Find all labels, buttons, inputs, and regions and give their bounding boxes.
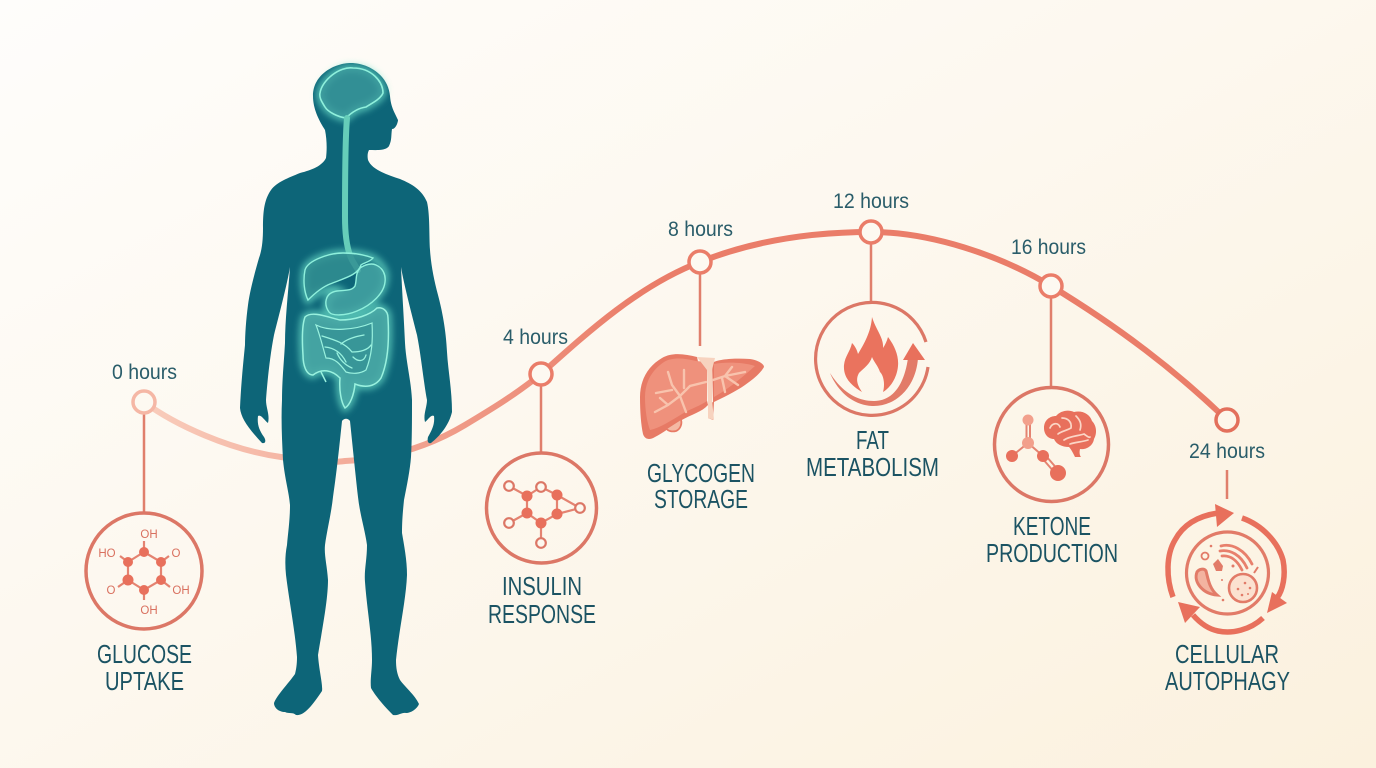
heading: FAT: [856, 425, 889, 455]
icon: glucose molecule: O: [107, 585, 116, 597]
heading line 2: METABOLISM: [806, 452, 939, 482]
time label: 24 hours: [1189, 440, 1265, 463]
intestines: [302, 308, 388, 408]
connector: [540, 386, 542, 453]
icon: glucose molecule: [86, 513, 202, 629]
node: [689, 251, 711, 273]
icon: glucose molecule: HO: [98, 548, 116, 560]
heading: GLUCOSE: [97, 639, 192, 669]
heading: KETONE: [1013, 511, 1091, 541]
connector: [870, 244, 872, 302]
connector: [699, 274, 701, 346]
heading line 2: RESPONSE: [488, 599, 596, 629]
icon: liver: [640, 354, 764, 439]
icon: insulin molecule: [486, 453, 596, 563]
icon: glucose molecule: O: [172, 548, 181, 560]
heading line 2: AUTOPHAGY: [1165, 666, 1290, 696]
time label: 12 hours: [833, 190, 909, 213]
liver organ: [304, 253, 373, 300]
step: 0 hours glucose uptake: [86, 361, 202, 696]
connector: [1050, 298, 1052, 387]
body silhouette: [240, 63, 452, 715]
esophagus: [345, 118, 358, 270]
connector: [1226, 470, 1228, 499]
time label: 0 hours: [112, 361, 177, 384]
node: [860, 221, 882, 243]
step: 24 hours cellular autophagy: [1165, 409, 1290, 696]
heading: GLYCOGEN: [647, 458, 755, 488]
step: 4 hours insulin response: [486, 326, 596, 629]
node: [530, 363, 552, 385]
icon: glucose molecule: OH: [140, 529, 158, 541]
heading line 2: UPTAKE: [105, 666, 184, 696]
glow: digestive organs: [302, 68, 388, 408]
step: 16 hours ketone production: [986, 236, 1118, 568]
connector: [143, 414, 145, 512]
node: [1216, 409, 1238, 431]
node: [133, 391, 155, 413]
brain outline: [320, 68, 383, 118]
step: 8 hours glycogen storage: [640, 218, 764, 514]
icon: autophagy cycle: [1168, 504, 1287, 632]
icon: ketone and brain: [994, 388, 1108, 502]
icon: flame: [816, 302, 928, 415]
time label: 16 hours: [1011, 236, 1086, 259]
heading: INSULIN: [502, 571, 582, 601]
icon: glucose molecule: OH: [140, 605, 158, 617]
heading: CELLULAR: [1175, 639, 1279, 669]
stomach: [326, 264, 385, 315]
heading line 2: PRODUCTION: [986, 538, 1118, 568]
time label: 4 hours: [503, 326, 568, 349]
icon: glucose molecule: OH: [172, 585, 190, 597]
human body figure: [240, 63, 452, 715]
heading line 2: STORAGE: [654, 484, 748, 514]
node: [1040, 275, 1062, 297]
step: 12 hours fat metabolism: [806, 190, 939, 482]
timeline curve: [144, 232, 1227, 462]
time label: 8 hours: [668, 218, 733, 241]
